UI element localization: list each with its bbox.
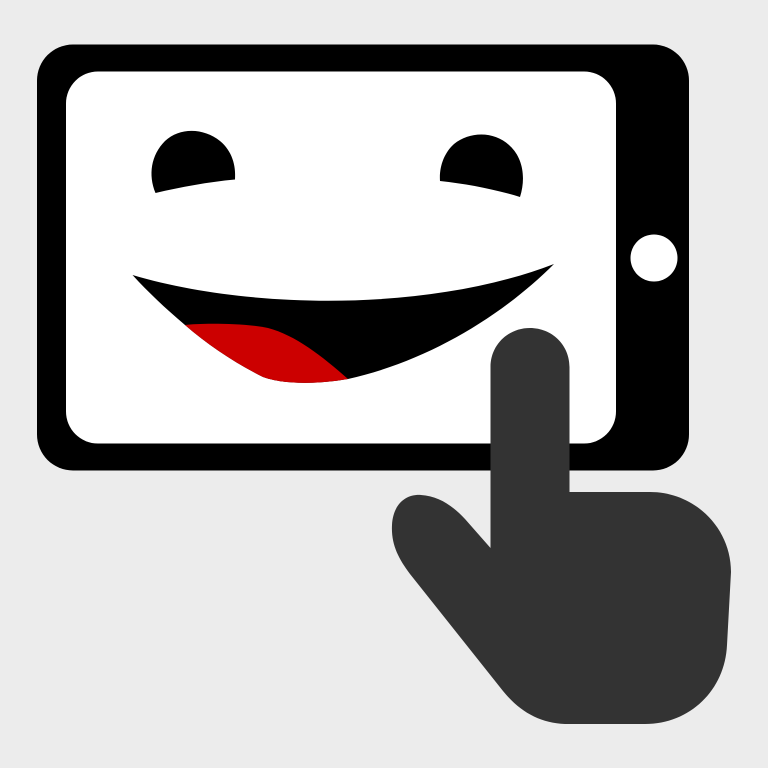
icon: pointing hand	[392, 328, 731, 724]
tongue	[185, 324, 348, 383]
icon: right eye	[440, 134, 523, 197]
smiling mouth	[132, 264, 554, 383]
tablet screen	[66, 72, 616, 444]
tablet body	[37, 44, 689, 470]
tablet home button	[630, 234, 678, 282]
icon: left eye	[152, 131, 235, 193]
